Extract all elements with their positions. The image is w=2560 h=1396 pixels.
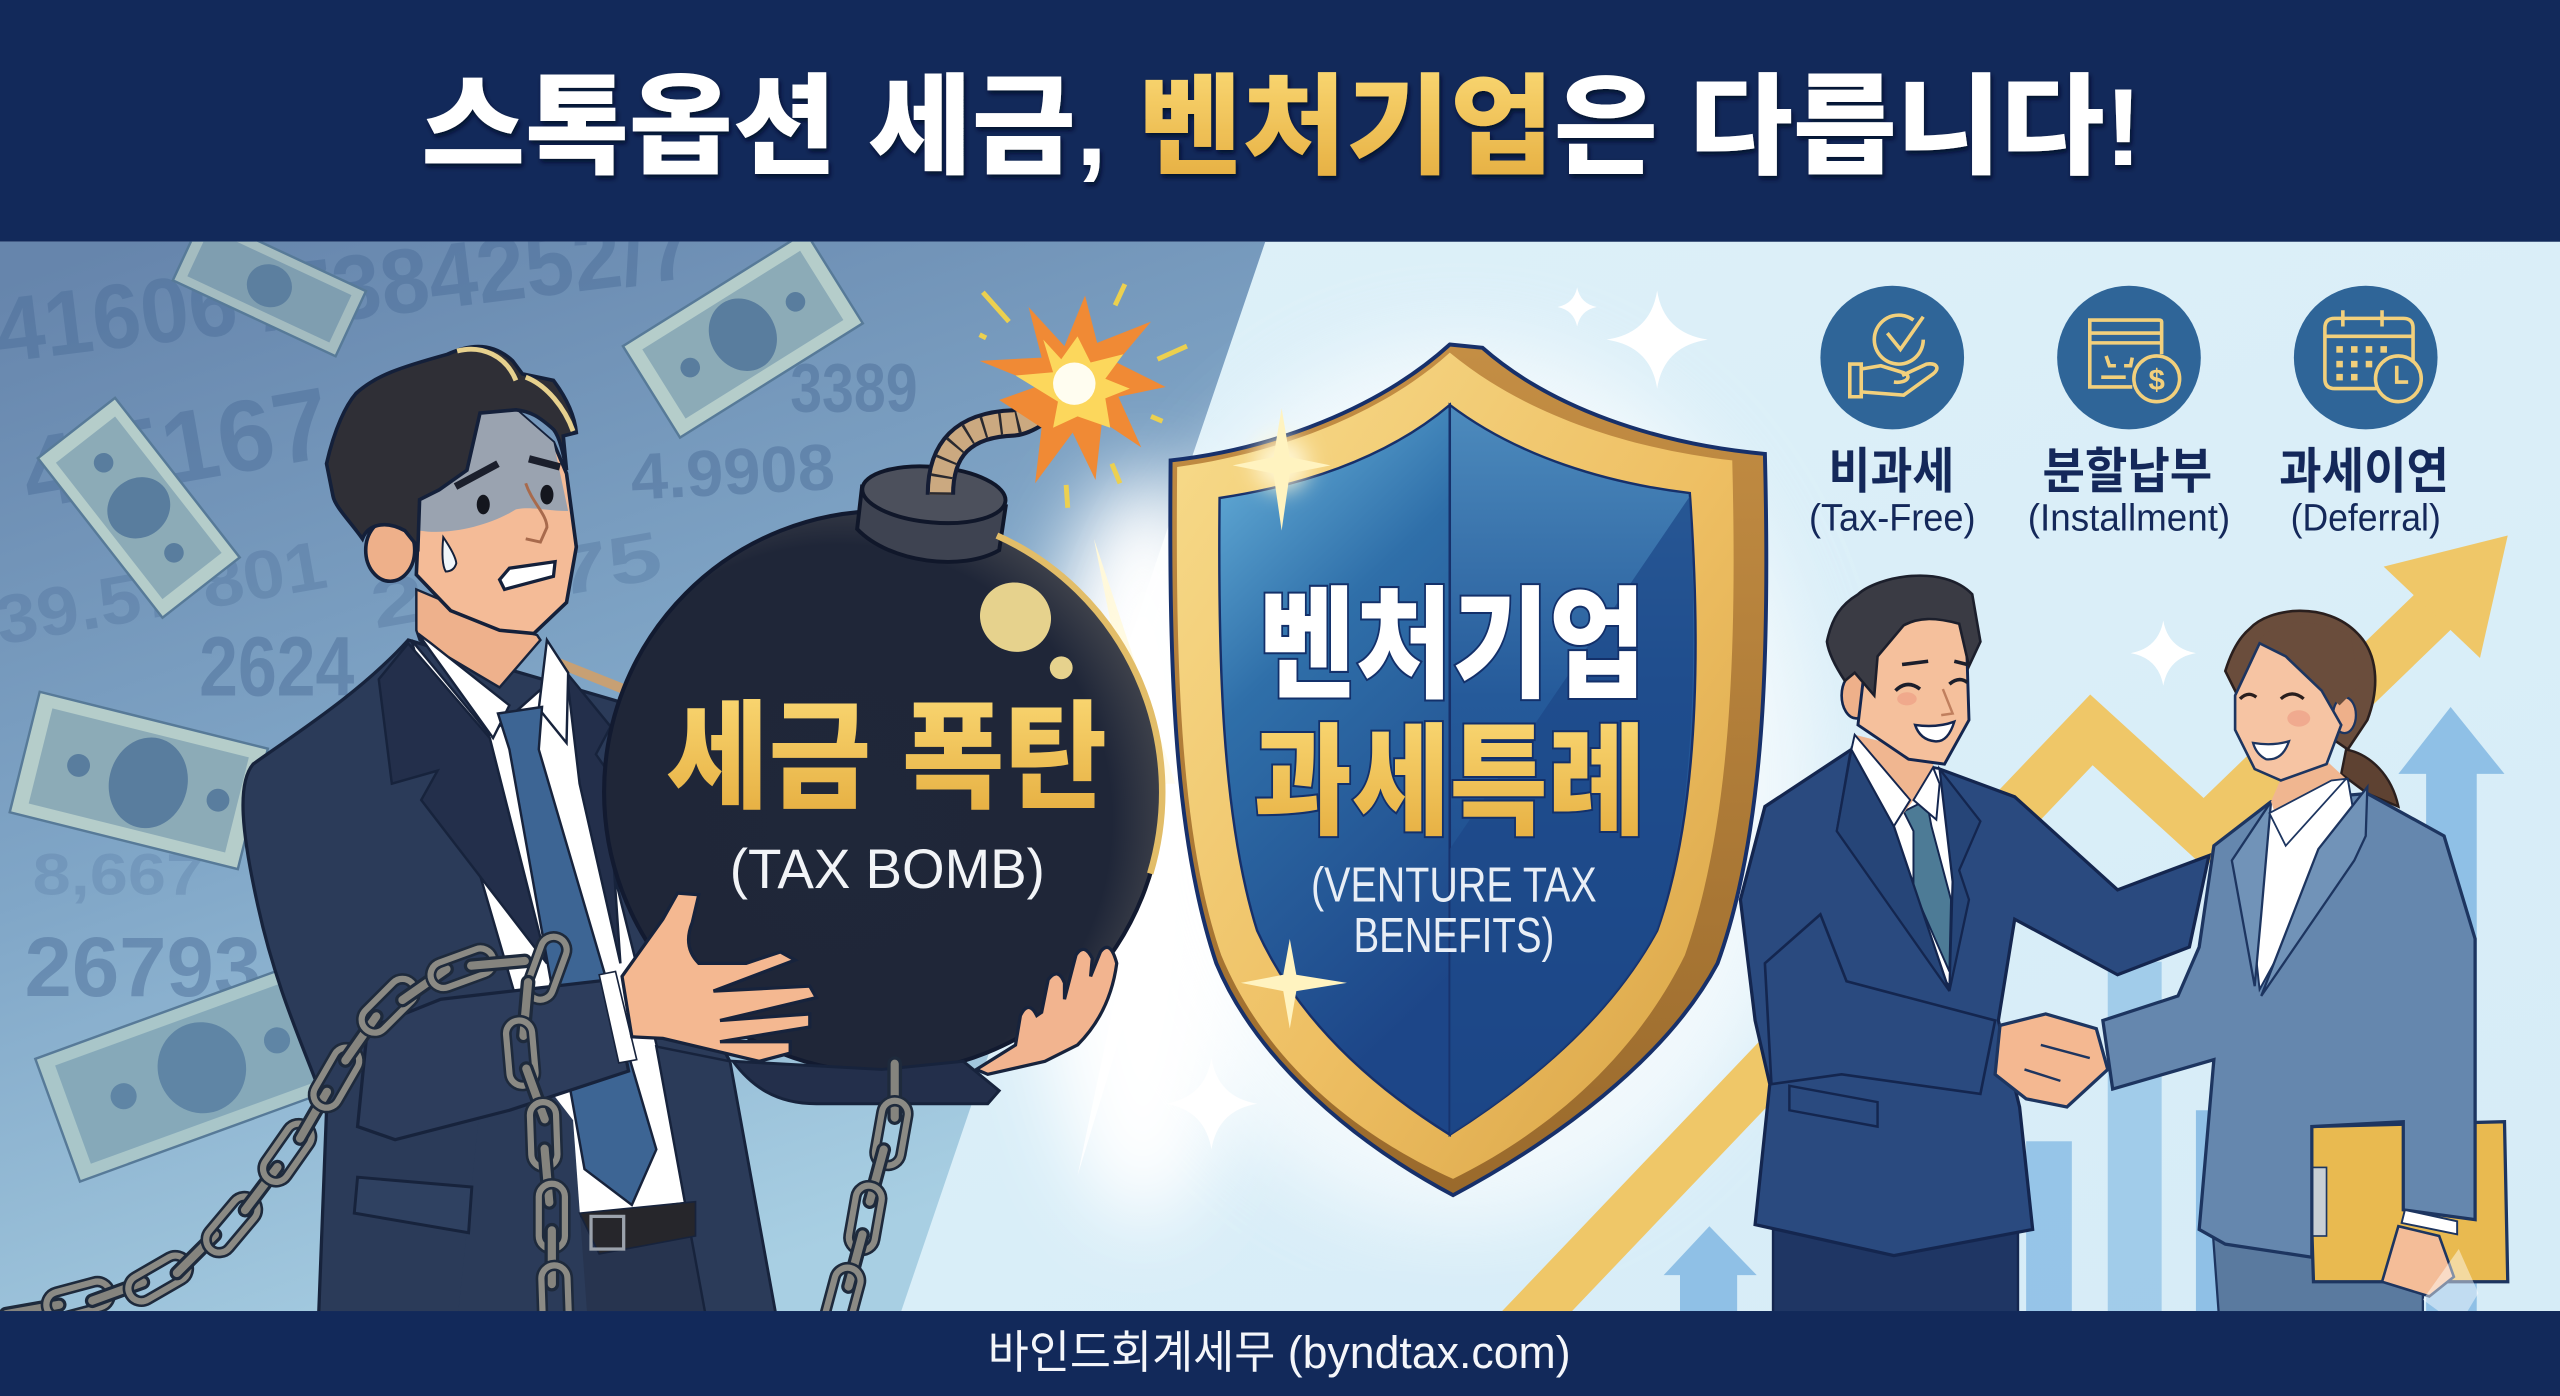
label: installment: 분할납부 [2042,445,2212,499]
lapels [379,643,547,963]
label: deferral english: (Deferral) [2291,497,2441,539]
front sleeve [358,980,629,1140]
collar [2269,779,2346,846]
header band [0,0,2560,242]
blush [2287,710,2310,727]
right jacket front [656,1047,777,1323]
right lapel [567,673,620,963]
head [416,410,576,634]
background numbers: 2624 [199,619,354,714]
footer text: 바인드회계세무 (byndtax.com) [988,1327,1571,1378]
background numbers: 2 4975 [365,517,668,643]
man with tax bomb [243,347,777,1323]
background numbers: 26793 [24,919,261,1014]
bomb sphere [604,511,1162,1073]
belt [580,1202,696,1254]
ear [366,519,415,581]
shield dark facet [1450,496,1693,1135]
trousers [1773,1225,2018,1314]
background numbers: 3389 [790,349,918,426]
trousers [580,1218,704,1311]
hair [1827,576,1980,696]
rising gold zigzag arrow [1518,536,2508,1331]
background numbers: 41606 /7384252/7 [0,196,699,382]
mouth [500,562,555,589]
bomb heading: 세금 폭탄 [666,692,1107,823]
neck [416,589,540,687]
clip [2305,1167,2327,1236]
left hand [622,893,816,1061]
bomb subtitle: (TAX BOMB) [730,838,1045,900]
closed eyes [2240,694,2304,699]
footer band [0,1311,2560,1396]
shirt cuff [599,971,637,1063]
neck [1851,735,1933,826]
hair front [2260,622,2359,705]
cuff [2402,1210,2457,1234]
icon: deferral [2294,286,2438,429]
right background [0,242,2560,1311]
flying banknotes [10,215,863,1182]
sleeve under bomb [733,1061,999,1104]
hair [327,347,576,547]
label: installment english: (Installment) [2028,497,2230,539]
background numbers [0,196,918,1014]
jacket [2103,794,2475,1257]
strap [558,663,624,689]
buckle [591,1216,624,1249]
shield subtitle line 2: BENEFITS) [1353,909,1554,963]
left lapel [2232,802,2271,986]
businessman [1740,576,2209,1314]
sparkles [1166,287,2196,1149]
businesswoman [2103,611,2508,1326]
ear [1842,673,1871,718]
bomb neck [857,487,1006,562]
front sleeve [1765,914,1995,1094]
left background [0,242,1265,1311]
necktie [498,707,656,1205]
collar [418,634,568,743]
jacket pocket [1789,1086,1878,1127]
trousers [2212,1225,2423,1314]
shield blue field, left facet [1219,405,1450,1135]
background numbers: 8,667 [33,843,204,908]
shadow over eyes [420,410,568,532]
jacket [243,640,777,1323]
head [1858,614,1969,764]
icon: installment: $ [2149,364,2165,397]
chains [0,933,910,1335]
closed eyes and brows [1896,661,1967,691]
sparkle over hand [2423,1249,2478,1326]
jacket and arm [1740,749,2209,1256]
nose [1941,689,1953,715]
blouse [2250,779,2354,989]
shirt [411,640,696,1216]
folder [2309,1122,2508,1282]
background numbers: 4 5167 [14,366,339,531]
label: tax-free english: (Tax-Free) [1809,497,1976,539]
shield heading line 2: 과세특례 [1254,716,1646,851]
eyes [477,495,490,514]
sweat drop [442,537,456,571]
spark [980,284,1187,508]
ear [2333,697,2356,733]
icon: tax-free [1820,286,1964,429]
right hand [976,947,1117,1074]
hair back [2225,611,2375,749]
benefit labels [1809,445,2449,539]
collar [1851,735,1940,826]
shield heading line 1: 벤처기업 [1259,578,1646,713]
left lapel [1837,749,1949,991]
gold rim light [997,536,1162,874]
nose [526,483,547,542]
highlights [967,570,1073,679]
jacket pocket [354,1177,472,1233]
necktie [1904,800,1951,971]
shield blue field, right facet [1450,405,1696,1135]
bomb [604,397,1162,1073]
shield gold frame [1177,353,1734,1179]
smile [2253,741,2289,759]
blush [1897,692,1917,705]
label: deferral: 과세이연 [2279,445,2449,499]
shield subtitle line 1: (VENTURE TAX [1311,858,1597,912]
neck [2271,761,2346,846]
arms and hands [358,947,1117,1140]
shield glints [1256,438,1308,490]
background numbers: 4.9908 [629,430,836,514]
right lapel [1940,769,1980,991]
light burst behind shield [1029,343,1812,1225]
shield [1170,345,1766,1195]
left jacket front [551,1097,586,1309]
hand on folder [2382,1226,2454,1296]
shield bronze back [1170,345,1766,1195]
hair highlights [457,349,573,431]
label: tax-free: 비과세 [1829,445,1954,499]
smile [1915,722,1954,741]
blue growth bars and arrows [1664,707,2504,1311]
handshake [1995,1014,2108,1107]
head [2235,643,2341,780]
right lapel [2261,787,2367,996]
icon: installment [2057,286,2201,429]
fuse [940,397,1058,495]
ponytail [2341,749,2398,807]
shirt [1837,754,1959,986]
title: 스톡옵션 세금, 벤처기업은 다릅니다! [421,67,2142,189]
eyebrows [456,459,560,487]
